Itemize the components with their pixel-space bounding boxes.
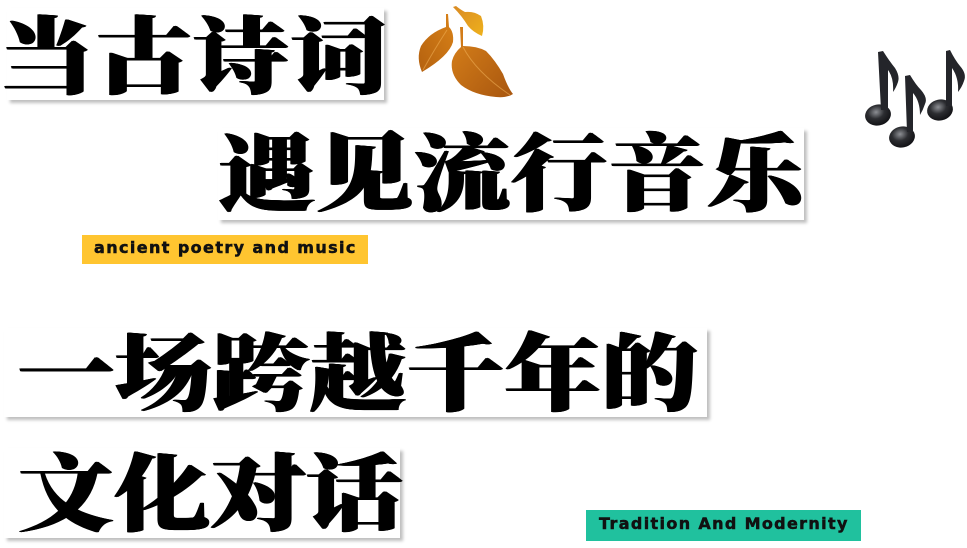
panel: heading line 2 backing bbox=[218, 128, 804, 220]
panel: heading line 4 backing bbox=[4, 448, 400, 538]
tag: ancient poetry and music: ancient poetry and music bbox=[94, 238, 357, 257]
panel: heading line 1 backing bbox=[7, 8, 384, 100]
heading line 1: 当古诗词 bbox=[0, 11, 388, 105]
tag: Tradition And Modernity bbox=[586, 510, 861, 541]
heading line 4: 文化对话 bbox=[18, 448, 402, 542]
tag: ancient poetry and music bbox=[82, 235, 368, 264]
heading line 2: 遇见流行音乐 bbox=[219, 128, 804, 222]
tag: Tradition And Modernity: Tradition And Modernity bbox=[599, 514, 849, 533]
heading line 3: 一场跨越千年的 bbox=[18, 328, 699, 422]
panel: heading line 3 backing bbox=[4, 328, 707, 417]
